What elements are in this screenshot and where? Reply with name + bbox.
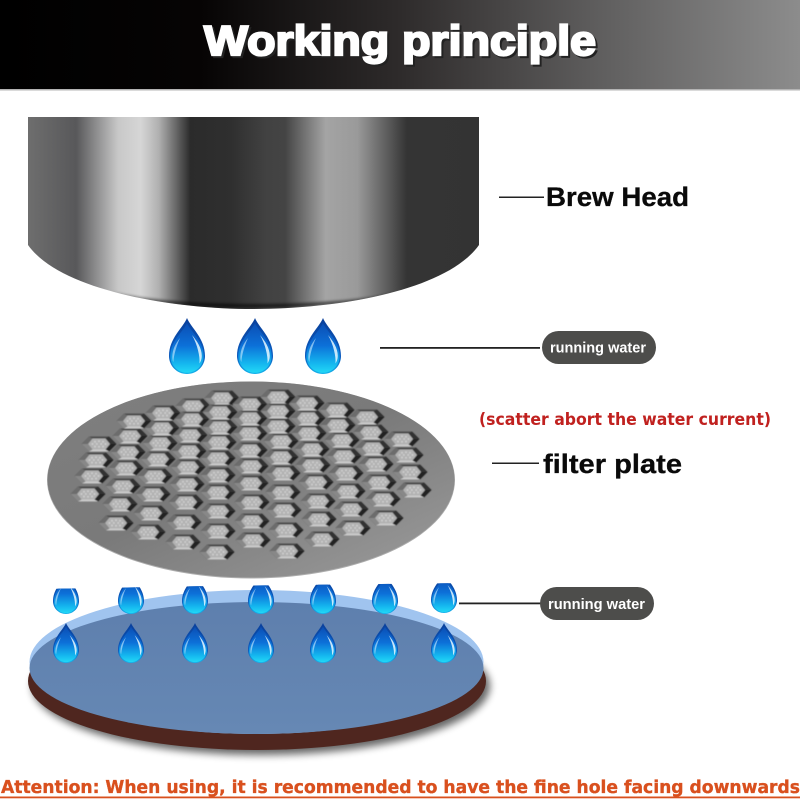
brew head cylinder xyxy=(28,117,479,309)
hexagonal mesh cells xyxy=(70,390,432,560)
lower water drops top row xyxy=(53,583,457,614)
brew head label: Brew Head xyxy=(546,182,689,212)
running water label upper: running water xyxy=(550,340,646,356)
filter plate label: filter plate xyxy=(543,449,682,479)
lower water drops bottom row xyxy=(53,623,457,663)
running water label upper xyxy=(380,331,656,364)
running water label lower: running water xyxy=(548,596,645,613)
title: Working principle xyxy=(204,17,596,64)
header banner xyxy=(0,0,800,90)
running water label lower xyxy=(459,587,654,620)
coffee puck disk xyxy=(28,590,490,755)
upper water drops xyxy=(169,318,341,374)
filter plate xyxy=(47,382,455,578)
scatter note: (scatter abort the water current) xyxy=(479,410,771,429)
